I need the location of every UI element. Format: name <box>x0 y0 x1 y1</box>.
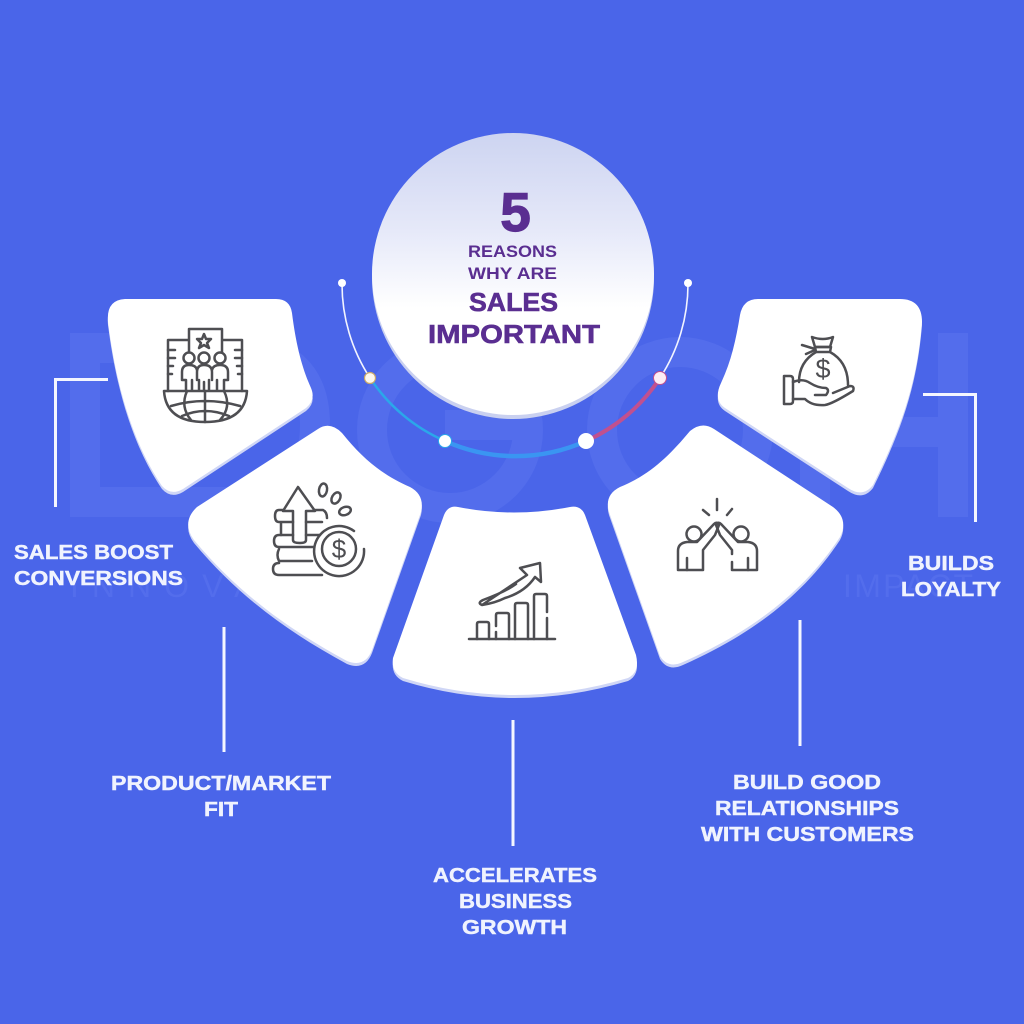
icon: high five <box>678 499 757 570</box>
progress arc <box>338 279 692 456</box>
title number 5: 5 <box>500 181 531 243</box>
connector line: product market fit <box>222 627 226 752</box>
label: sales boost conversions: SALES BOOST <box>14 542 173 564</box>
panel: accelerates business growth <box>393 507 637 698</box>
connector line: sales boost <box>56 380 108 507</box>
icon: coins and arrow <box>273 483 364 576</box>
connector line: builds loyalty <box>923 394 976 522</box>
watermark <box>70 333 973 604</box>
label: build good relationships: WITH CUSTOMERS <box>701 824 914 846</box>
label: builds loyalty: LOYALTY <box>901 579 1002 601</box>
label: accelerates business growth <box>433 865 597 939</box>
icon detail: dollar sign: $ <box>815 354 831 384</box>
label: accelerates business growth: ACCELERATES <box>433 865 597 887</box>
label: accelerates business growth: BUSINESS <box>459 891 572 913</box>
watermark: IMPACT <box>843 568 973 604</box>
panel: build good relationships <box>608 425 843 667</box>
label: build good relationships: RELATIONSHIPS <box>715 798 899 820</box>
title line: sales: SALES <box>469 287 558 317</box>
panel: builds loyalty <box>718 299 922 495</box>
label: sales boost conversions <box>14 542 183 590</box>
label: sales boost conversions: CONVERSIONS <box>14 568 183 590</box>
icon: growth chart <box>469 563 555 639</box>
label: accelerates business growth: GROWTH <box>462 917 567 939</box>
panel: product market fit <box>188 426 422 666</box>
icon detail: dollar sign: $ <box>332 534 347 564</box>
center circle: title <box>372 133 654 419</box>
icon: money bag in hand <box>784 337 854 405</box>
icon: people globe <box>164 329 247 422</box>
title line: important: IMPORTANT <box>428 319 600 349</box>
label: builds loyalty: BUILDS <box>908 553 994 575</box>
label: product market fit <box>111 773 331 821</box>
title line: why are: WHY ARE <box>468 264 557 283</box>
title line: reasons: REASONS <box>468 242 557 261</box>
connector line: accelerates <box>512 720 514 846</box>
watermark: INNOVATE <box>70 568 320 604</box>
label: builds loyalty <box>901 553 1002 601</box>
label: build good relationships <box>701 772 914 846</box>
label: product market fit: FIT <box>204 799 238 821</box>
connector line: relationships <box>798 620 802 746</box>
label: build good relationships: BUILD GOOD <box>733 772 881 794</box>
label: product market fit: PRODUCT/MARKET <box>111 773 331 795</box>
panel: sales boost conversions <box>108 299 313 495</box>
